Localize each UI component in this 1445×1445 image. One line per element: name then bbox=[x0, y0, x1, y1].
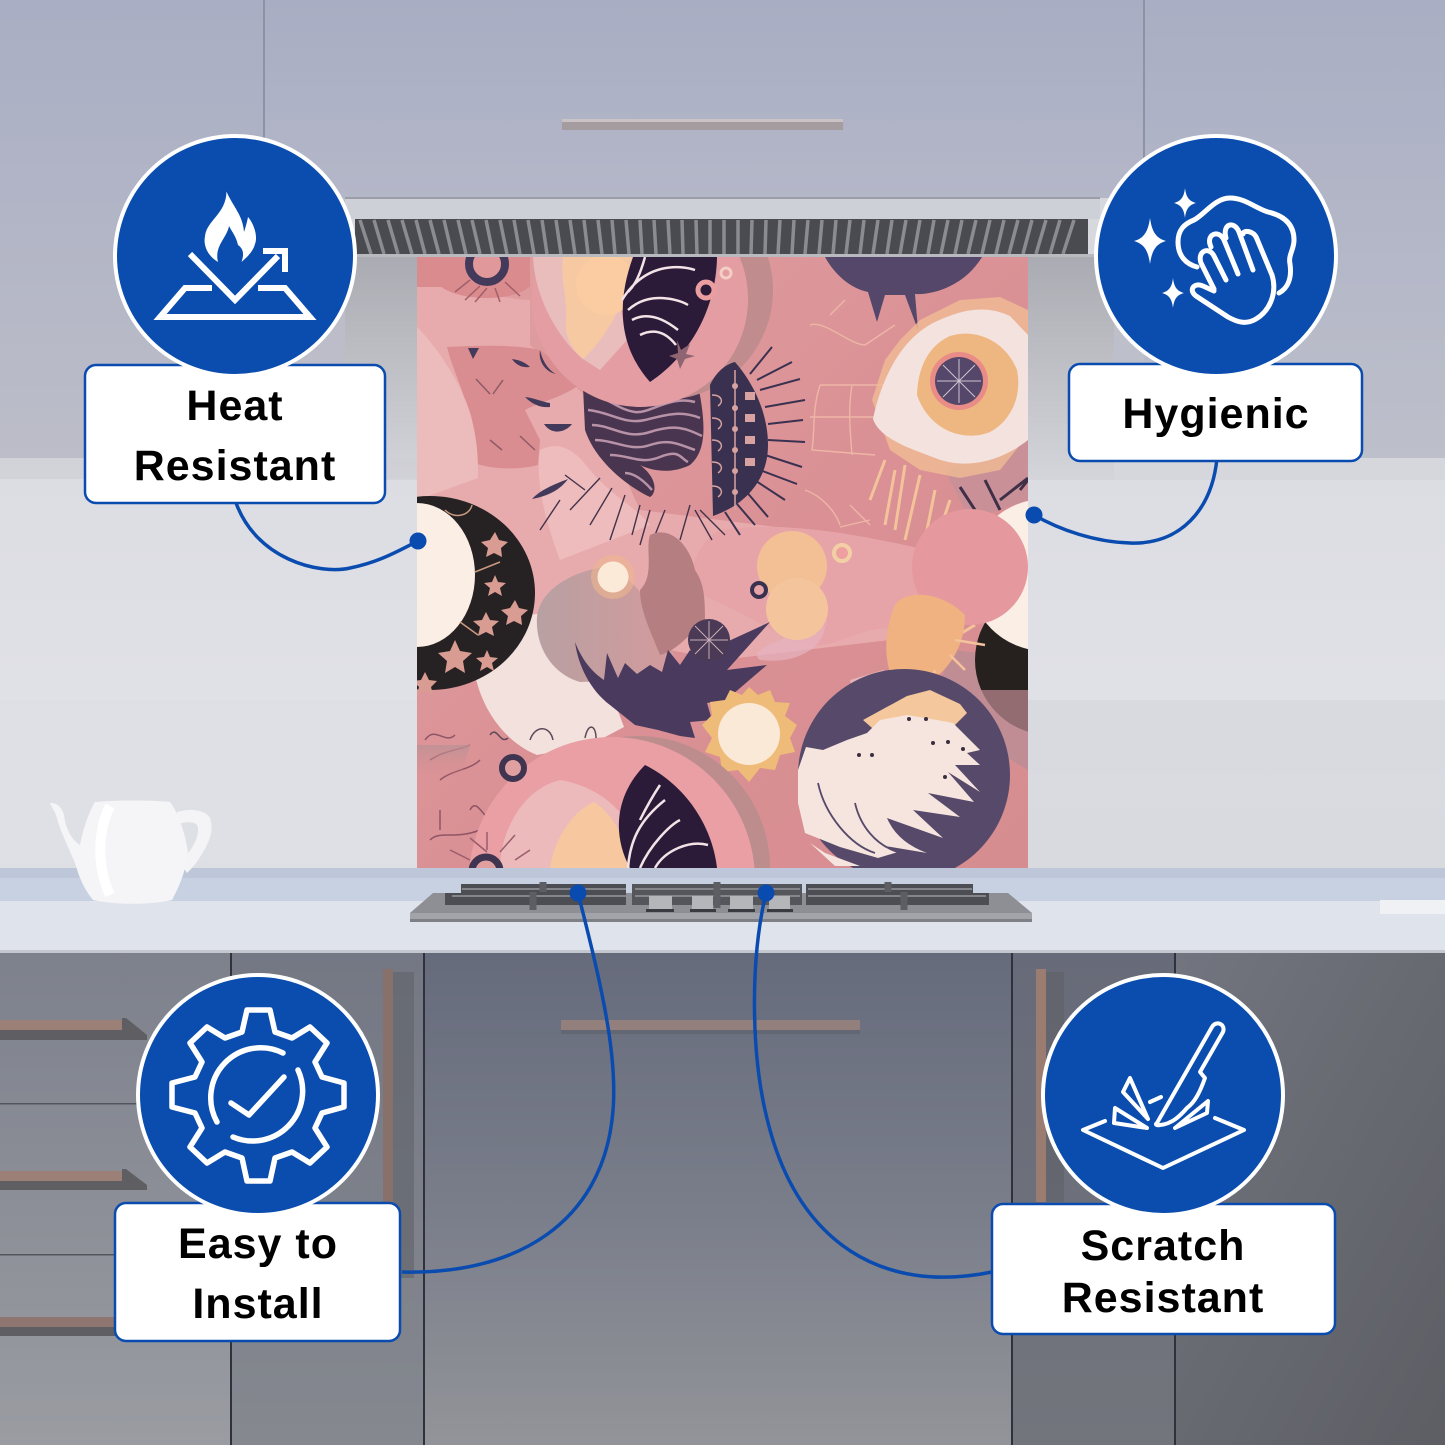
top pink circle with dark eye bbox=[533, 257, 773, 407]
connector: hygienic bbox=[1034, 458, 1217, 543]
label: Hygienic bbox=[1069, 364, 1362, 461]
sketch lines lower left bbox=[424, 734, 485, 840]
fleshy veins bbox=[805, 300, 895, 527]
upper cabinet handle bbox=[562, 119, 843, 130]
lower cabinets bbox=[0, 953, 1445, 1445]
label: Hygienic: Hygienic bbox=[1122, 390, 1310, 438]
small dark discs lower left bbox=[502, 757, 524, 779]
right edge moon and pink circle bbox=[912, 500, 1028, 732]
mauve mist blob bbox=[537, 568, 680, 683]
callout: scratch resistant bbox=[992, 975, 1335, 1334]
callout: easy to install bbox=[115, 975, 400, 1341]
label: Easy to Install: Easy to bbox=[178, 1220, 338, 1268]
cooktop bbox=[410, 882, 1032, 922]
label: Heat Resistant: Heat bbox=[186, 382, 284, 430]
connector dots bbox=[410, 506, 1042, 902]
peach flare blob bbox=[886, 594, 965, 675]
radiating spikes below center bbox=[540, 475, 725, 545]
center dark half disc with spikes bbox=[710, 347, 805, 535]
countertop bbox=[0, 868, 1445, 954]
panel: pink abstract splashback artwork bbox=[417, 257, 1028, 868]
heart peach shape bbox=[752, 531, 850, 661]
textured wavy ball bbox=[583, 385, 703, 497]
bottom pink circle with dark eye bbox=[470, 736, 770, 868]
pale blob below moon bbox=[473, 610, 624, 755]
connector: scratch resistant bbox=[754, 893, 992, 1277]
connector: heat resistant bbox=[235, 500, 418, 570]
icon badge: gear with check bbox=[138, 975, 378, 1215]
connector lines bbox=[235, 458, 1217, 1277]
navy feather marks bbox=[468, 348, 572, 499]
icon badge: flame on surface bbox=[115, 136, 355, 376]
spiky dark crescent bbox=[575, 619, 770, 738]
label: Scratch Resistant: Resistant bbox=[1062, 1274, 1264, 1322]
label: Scratch Resistant: Scratch bbox=[1081, 1222, 1245, 1270]
teapot bbox=[50, 800, 212, 904]
small glowing sun bbox=[591, 555, 635, 599]
icon badge: knife scratching surface bbox=[1043, 975, 1283, 1215]
top dark half circle bbox=[825, 257, 982, 330]
peach flare strands bbox=[868, 460, 976, 634]
top left mini sun bbox=[417, 257, 530, 302]
range hood bbox=[345, 197, 1100, 257]
bottom right shell bbox=[798, 669, 1028, 881]
label: Easy to Install bbox=[115, 1203, 400, 1341]
label: Heat Resistant bbox=[85, 365, 385, 503]
right eye bbox=[872, 297, 1028, 478]
label: Scratch Resistant bbox=[992, 1204, 1335, 1334]
left star moon bbox=[417, 496, 535, 690]
label: Easy to Install: Install bbox=[192, 1280, 324, 1328]
connector: easy to install bbox=[402, 893, 614, 1272]
soft background shapes bbox=[417, 286, 890, 660]
callout: hygienic bbox=[1069, 136, 1362, 461]
icon badge: hand wiping with sparkles bbox=[1096, 136, 1336, 376]
dusty right corner bbox=[948, 440, 1028, 512]
bottom sun bbox=[702, 687, 797, 782]
label: Heat Resistant: Resistant bbox=[134, 442, 336, 490]
callout: heat resistant bbox=[85, 136, 385, 503]
